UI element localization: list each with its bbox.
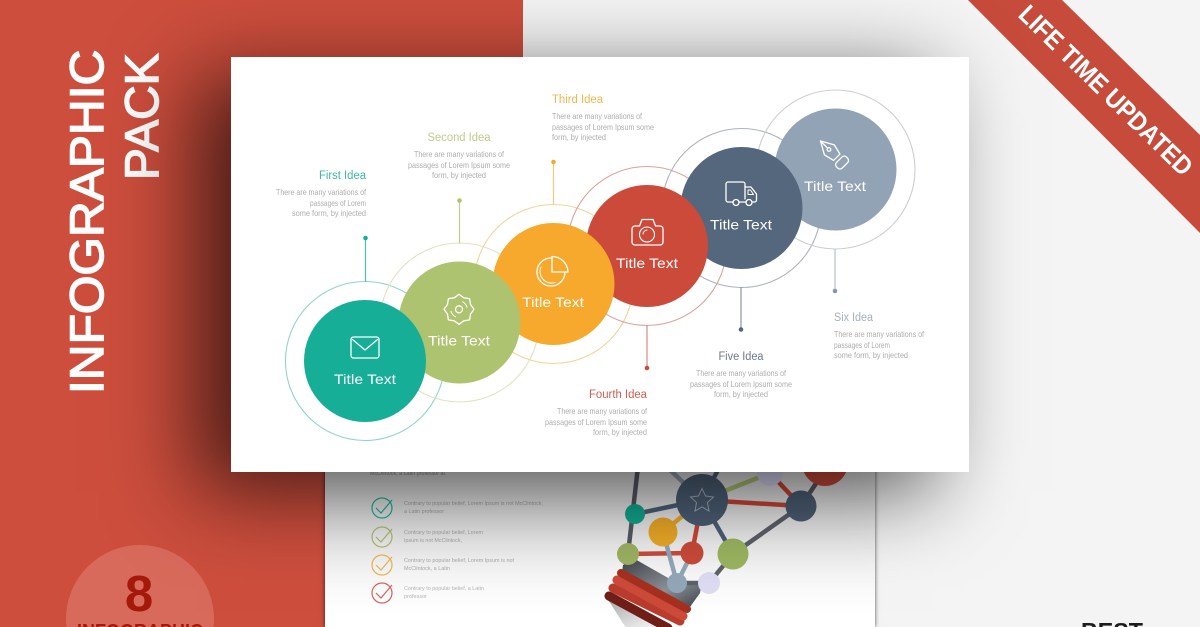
panel: main white slide bbox=[231, 57, 969, 472]
check item 2 bbox=[372, 527, 483, 547]
text: Six Idea: There are many variations of bbox=[834, 329, 925, 339]
text: First Idea: First Idea bbox=[319, 170, 367, 182]
connector 3 bbox=[551, 160, 556, 205]
disc labels: Title Text bbox=[522, 294, 584, 310]
text: Third Idea: form, by injected bbox=[552, 132, 606, 142]
back slide content bbox=[370, 471, 846, 627]
icon: truck bbox=[726, 182, 756, 206]
check item 1: a Latin professor bbox=[404, 509, 444, 515]
connector 4 bbox=[645, 325, 649, 370]
check item 1: Contrary to popular belief, Lorem Ipsum is not McClintock, bbox=[404, 501, 543, 507]
check item 4: Contrary to popular belief, a Latin bbox=[404, 586, 484, 592]
icons bbox=[351, 136, 850, 358]
text: Six Idea bbox=[834, 312, 925, 360]
text: Fourth Idea: Fourth Idea bbox=[589, 389, 648, 401]
connector 2 bbox=[457, 198, 462, 244]
outer rings bbox=[286, 90, 915, 440]
text: Fourth Idea: form, by injected bbox=[593, 427, 647, 437]
panel: red left background bbox=[0, 0, 523, 627]
text: Five Idea: form, by injected bbox=[714, 389, 768, 399]
text: Six Idea: passages of Lorem bbox=[834, 340, 890, 350]
badge: 8 infographic bbox=[66, 545, 214, 627]
text: Five Idea: Five Idea bbox=[718, 351, 764, 363]
text: First Idea bbox=[276, 170, 367, 218]
icon: gear bbox=[444, 294, 474, 324]
panel: back slide with checklist and bulb bbox=[325, 440, 875, 627]
disc labels: Title Text bbox=[428, 332, 490, 348]
icon: pen nib bbox=[816, 136, 850, 170]
connector 6 bbox=[833, 249, 837, 293]
check item 3: Contrary to popular belief, Lorem Ipsum is not bbox=[404, 558, 514, 564]
connectors bbox=[363, 160, 837, 370]
icon: pie chart bbox=[537, 256, 568, 286]
check item 1 bbox=[372, 498, 543, 518]
check item 4 bbox=[372, 583, 484, 603]
disc labels: Title Text bbox=[616, 255, 678, 271]
discs bbox=[304, 108, 896, 422]
text: Fourth Idea bbox=[545, 389, 648, 437]
text: First Idea: There are many variations of bbox=[276, 187, 367, 197]
text: Five Idea: passages of Lorem Ipsum some bbox=[690, 379, 792, 389]
disc labels bbox=[334, 178, 866, 387]
text: Fourth Idea: There are many variations of bbox=[557, 406, 648, 416]
text: Second Idea bbox=[408, 132, 510, 180]
cut-off intro text: McClintock, a Latin professor at bbox=[370, 471, 445, 477]
text: Five Idea: There are many variations of bbox=[696, 368, 787, 378]
text: Third Idea bbox=[552, 94, 654, 142]
title: INFOGRAPHIC PACK bbox=[61, 50, 169, 394]
ribbon: life time updated bbox=[968, 0, 1200, 233]
check item 2: Ipsum is not McClintock, bbox=[404, 538, 462, 544]
disc labels: Title Text bbox=[710, 216, 772, 232]
disc labels: Title Text bbox=[804, 178, 866, 194]
icon: star bbox=[690, 488, 714, 511]
text: Fourth Idea: passages of Lorem Ipsum some bbox=[545, 417, 647, 427]
infographic diagram bbox=[276, 90, 925, 441]
connector 1 bbox=[363, 236, 368, 282]
title: INFOGRAPHIC PACK: PACK bbox=[116, 53, 169, 180]
text: Third Idea: Third Idea bbox=[552, 94, 604, 106]
light bulb network illustration bbox=[607, 440, 848, 627]
badge: 8 infographic: 8 bbox=[125, 565, 153, 622]
title: INFOGRAPHIC PACK: INFOGRAPHIC bbox=[61, 50, 114, 394]
text: Third Idea: There are many variations of bbox=[552, 111, 643, 121]
text: Third Idea: passages of Lorem Ipsum some bbox=[552, 122, 654, 132]
icon: envelope bbox=[351, 337, 379, 358]
text: First Idea: passages of Lorem bbox=[310, 198, 366, 208]
disc labels: Title Text bbox=[334, 371, 396, 387]
checklist bbox=[372, 498, 543, 603]
text: Six Idea: Six Idea bbox=[834, 312, 874, 324]
text: Second Idea: passages of Lorem Ipsum some bbox=[408, 160, 510, 170]
text: Six Idea: some form, by injected bbox=[834, 350, 908, 360]
connector 5 bbox=[739, 287, 743, 332]
check item 3 bbox=[372, 555, 514, 575]
text: Five Idea bbox=[690, 351, 792, 399]
check item 3: McClintock, a Latin bbox=[404, 566, 450, 572]
text: Second Idea: form, by injected bbox=[432, 170, 486, 180]
text: First Idea: some form, by injected bbox=[292, 208, 366, 218]
check item 4: professor bbox=[404, 594, 427, 600]
text: Second Idea: There are many variations of bbox=[414, 149, 505, 159]
text: Second Idea: Second Idea bbox=[428, 132, 491, 144]
icon: camera bbox=[632, 220, 663, 245]
check item 2: Contrary to popular belief, Lorem bbox=[404, 530, 483, 536]
